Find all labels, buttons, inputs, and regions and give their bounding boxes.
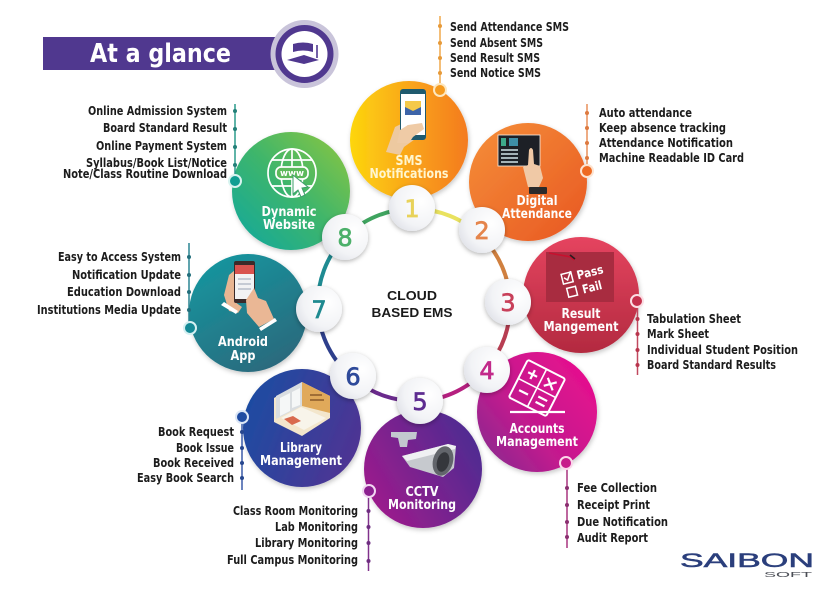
label: Dynamic Website (262, 205, 316, 233)
feature list: SMS Notifications: Send Result SMS (450, 51, 540, 65)
label: Digital Attendance (502, 194, 572, 222)
label: Digital Attendance: Digital (516, 194, 558, 209)
label: Dynamic Website: Dynamic (262, 205, 316, 220)
number badge 7 (296, 286, 342, 332)
feature list: SMS Notifications: Send Attendance SMS (450, 20, 569, 34)
feature list: Digital Attendance (581, 104, 744, 177)
label: Result Mangement (544, 307, 618, 335)
feature list: Dynamic Website (63, 104, 241, 187)
number badge 3 (485, 279, 531, 325)
feature list: Library Management: Book Request (158, 425, 234, 439)
title banner: At a glance: At a glance (90, 39, 231, 69)
feature list: Android App: Education Download (67, 285, 181, 299)
label: Accounts Management (496, 422, 578, 450)
feature list: Digital Attendance: Auto attendance (599, 106, 692, 120)
center text: Cloud Based EMS: CLOUD (387, 289, 437, 303)
center text: Cloud Based EMS (372, 289, 452, 320)
number badge 1: 1 (404, 195, 420, 223)
center text: Cloud Based EMS: BASED EMS (372, 306, 452, 320)
icon: calculator (509, 360, 565, 416)
feature list: Result Mangement: Mark Sheet (647, 327, 709, 341)
number badge 1 (389, 185, 435, 231)
number badge 4 (464, 347, 510, 393)
icon: hands holding smartphone (221, 261, 277, 331)
panel: Result Mangement (523, 237, 639, 353)
feature list: Accounts Management: Due Notification (577, 515, 668, 529)
number badge 2: 2 (474, 217, 490, 245)
panel: Digital Attendance (469, 123, 587, 241)
feature list: Result Mangement (631, 295, 798, 375)
feature list: Digital Attendance: Machine Readable ID Card (599, 151, 744, 165)
feature list: Android App: Institutions Media Update (37, 303, 181, 317)
feature list: Accounts Management (560, 457, 668, 548)
icon: isometric library room (274, 382, 330, 436)
central ring connecting the eight modules (318, 209, 510, 401)
title banner: At a glance (43, 20, 338, 88)
icon: pass fail checklist: Fail (581, 278, 604, 296)
feature list: SMS Notifications (434, 16, 569, 96)
label: Dynamic Website: Website (263, 218, 315, 233)
icon: phone with envelope in hand: SMS (407, 125, 419, 131)
label: SMS Notifications (370, 154, 449, 182)
feature list: Library Management: Easy Book Search (137, 471, 234, 485)
number badge 8 (322, 214, 368, 260)
feature list: Android App: Easy to Access System (58, 250, 181, 264)
feature list: Accounts Management: Fee Collection (577, 481, 657, 495)
feature list: Android App (37, 243, 196, 334)
label: Library Management (260, 441, 342, 469)
panel: Android App (189, 254, 307, 372)
icon: pass fail checklist: Pass (575, 262, 605, 282)
feature list: CCTV Monitoring: Class Room Monitoring (233, 504, 358, 518)
label: Digital Attendance: Attendance (502, 207, 572, 222)
number badge 5: 5 (412, 388, 428, 416)
feature list: Accounts Management: Audit Report (577, 531, 648, 545)
feature list: Library Management: Book Received (153, 456, 234, 470)
icon: security camera (391, 432, 457, 478)
number badge 3: 3 (500, 289, 516, 317)
label: SMS Notifications: Notifications (370, 167, 449, 182)
feature list: CCTV Monitoring: Library Monitoring (255, 536, 358, 550)
number badge 6: 6 (345, 363, 361, 391)
number badge 6 (330, 353, 376, 399)
feature list: Dynamic Website: Syllabus/Book List/Notice (86, 156, 227, 170)
panel: Library Management (243, 369, 361, 487)
number badge 8: 8 (337, 224, 353, 252)
number badge 4: 4 (479, 357, 495, 385)
label: Android App (218, 335, 268, 364)
label: SMS Notifications: SMS (396, 154, 422, 169)
feature list: Dynamic Website: Board Standard Result (103, 121, 227, 135)
label: CCTV Monitoring: CCTV (406, 485, 438, 500)
label: CCTV Monitoring: Monitoring (388, 498, 456, 513)
label: Accounts Management: Accounts (510, 422, 565, 437)
feature list: Digital Attendance: Keep absence tracking (599, 121, 726, 135)
logo: Saibon Soft: SOFT (764, 570, 813, 579)
feature list: CCTV Monitoring: Full Campus Monitoring (227, 553, 358, 567)
feature list: Result Mangement: Tabulation Sheet (647, 312, 741, 326)
feature list: Result Mangement: Board Standard Results (647, 358, 776, 372)
icon: globe with www and cursor: www (280, 169, 304, 179)
feature list: Library Management (137, 411, 248, 490)
label: Library Management: Management (260, 454, 342, 469)
feature list: CCTV Monitoring: Lab Monitoring (275, 520, 358, 534)
feature list: Digital Attendance: Attendance Notification (599, 136, 733, 150)
label: Android App: App (230, 349, 256, 364)
label: CCTV Monitoring (388, 485, 456, 513)
label: Library Management: Library (280, 441, 322, 456)
feature list: Dynamic Website: Note/Class Routine Download (63, 167, 227, 181)
feature list: Dynamic Website: Online Admission System (88, 104, 227, 118)
number badge 5 (397, 378, 443, 424)
number badge 7: 7 (311, 296, 327, 324)
logo: Saibon Soft: SAIBON (680, 551, 814, 572)
panel: CCTV Monitoring (364, 410, 482, 528)
feature list: Android App: Notification Update (72, 268, 181, 282)
panel: Accounts Management (477, 352, 597, 472)
label: Android App: Android (218, 335, 268, 350)
icon: fingerprint terminal and hand (498, 135, 547, 194)
feature list: Result Mangement: Individual Student Position (647, 343, 798, 357)
feature list: Library Management: Book Issue (176, 441, 234, 455)
panel: SMS Notifications (350, 81, 468, 199)
feature list: SMS Notifications: Send Notice SMS (450, 66, 541, 80)
feature list: Accounts Management: Receipt Print (577, 498, 650, 512)
panel: Dynamic Website (232, 132, 350, 250)
feature list: CCTV Monitoring (227, 485, 375, 571)
icon: pass fail checklist (546, 252, 614, 302)
label: Result Mangement: Mangement (544, 320, 618, 335)
logo: Saibon Soft (680, 551, 814, 579)
number badge 2 (459, 207, 505, 253)
feature list: SMS Notifications: Send Absent SMS (450, 36, 543, 50)
feature list: Dynamic Website: Online Payment System (96, 139, 227, 153)
label: Accounts Management: Management (496, 435, 578, 450)
label: Result Mangement: Result (562, 307, 600, 322)
